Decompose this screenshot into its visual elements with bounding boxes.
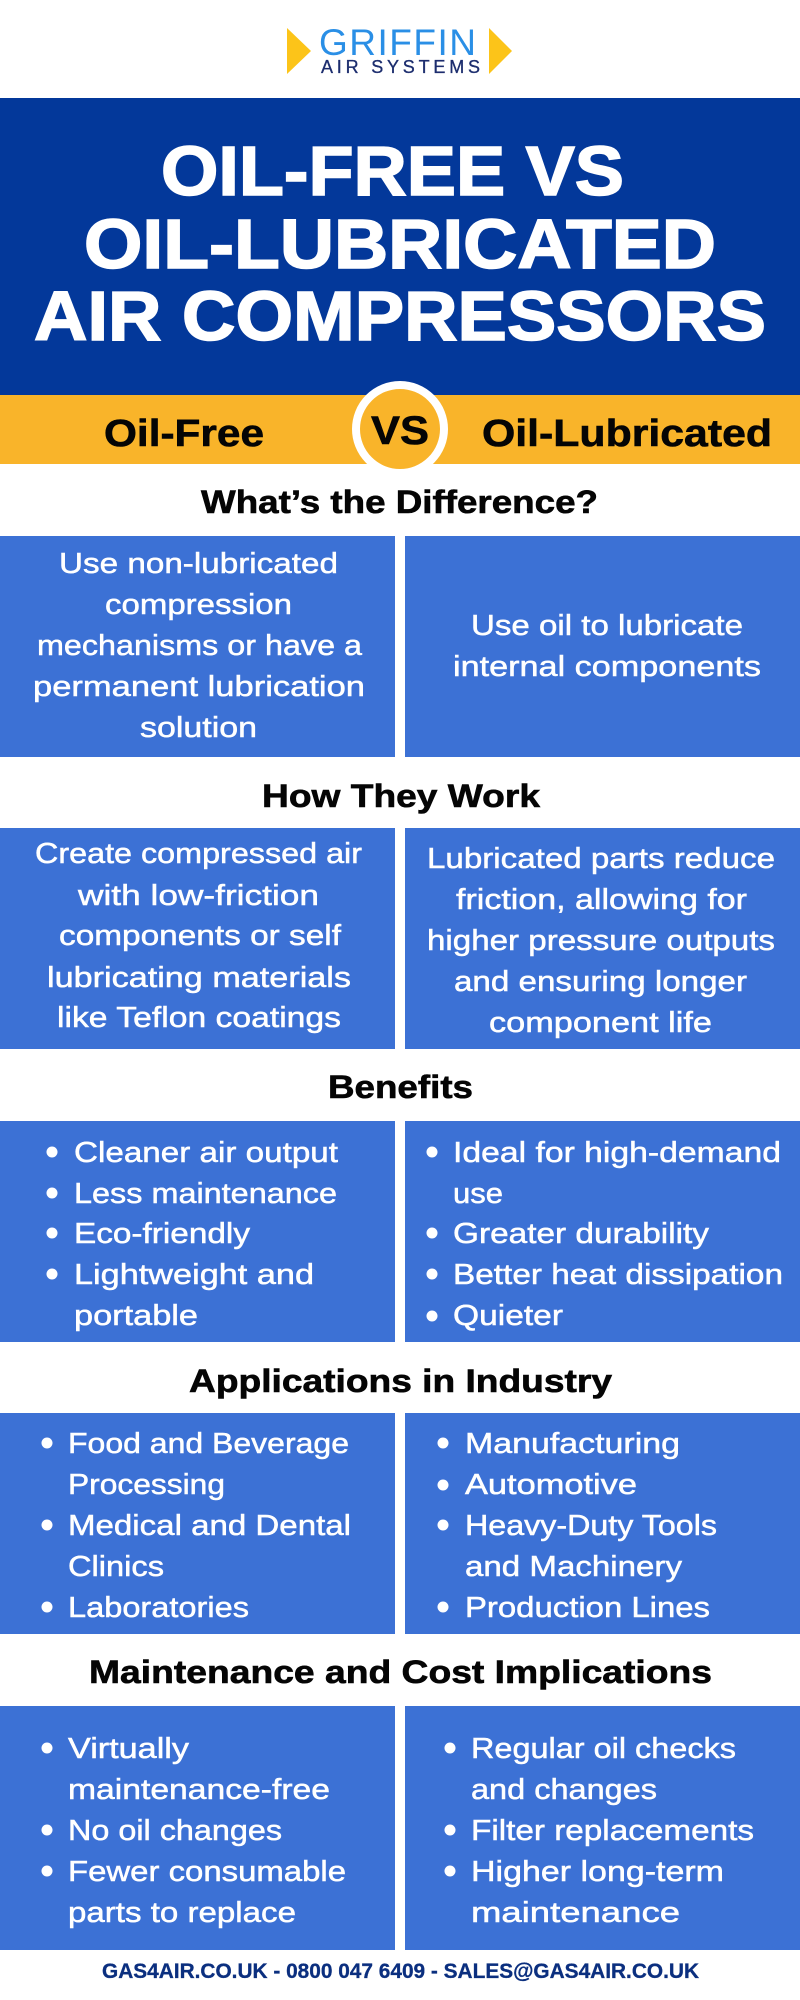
title: AIR COMPRESSORS — [34, 277, 766, 355]
panel: benefits, oil-lubricated: Better heat dissipation — [453, 1259, 783, 1291]
panel: how they work, oil-lubricated — [405, 828, 800, 1049]
panel: applications, oil-lubricated — [405, 1413, 800, 1634]
panel: applications, oil-free: Processing — [68, 1469, 225, 1501]
panel: how they work, oil-free: lubricating materials — [47, 962, 351, 994]
heading: what's the difference: What’s the Difference? — [201, 484, 598, 520]
title: OIL-FREE VS — [161, 132, 624, 210]
panel: maintenance, oil-free: maintenance-free — [68, 1774, 330, 1806]
panel: benefits, oil-lubricated — [405, 1121, 800, 1342]
panel: applications, oil-free — [0, 1413, 395, 1634]
panel: how they work, oil-lubricated: Lubricated parts reduce — [427, 843, 775, 875]
panel: applications, oil-free: Medical and Dental — [68, 1510, 351, 1542]
header banner — [0, 98, 800, 395]
panel: applications, oil-lubricated: and Machinery — [465, 1551, 683, 1583]
panel: maintenance, oil-lubricated — [405, 1706, 800, 1950]
heading: maintenance and cost implications: Maintenance and Cost Implications — [89, 1654, 712, 1690]
panel: how they work, oil-lubricated: component life — [489, 1007, 712, 1039]
panel: maintenance, oil-lubricated: and changes — [471, 1774, 657, 1806]
panel: difference, oil-free: solution — [140, 712, 257, 744]
panel: how they work, oil-lubricated: friction, allowing for — [456, 884, 747, 916]
label: oil-lubricated: Oil-Lubricated — [482, 413, 772, 455]
panel: applications, oil-lubricated: Manufacturing — [465, 1428, 680, 1460]
panel: benefits, oil-free: Eco-friendly — [74, 1218, 251, 1250]
panel: benefits, oil-lubricated: Quieter — [453, 1300, 563, 1332]
heading: how they work: How They Work — [262, 778, 540, 814]
panel: maintenance, oil-lubricated: Filter replacements — [471, 1815, 754, 1847]
label: oil-free: Oil-Free — [104, 413, 264, 455]
panel: benefits, oil-free: Less maintenance — [74, 1178, 337, 1210]
VS badge — [356, 385, 444, 473]
panel: how they work, oil-free: with low-friction — [77, 880, 319, 912]
panel: difference, oil-lubricated: internal components — [453, 651, 761, 683]
logo: Griffin Air Systems — [287, 22, 512, 77]
panel: applications, oil-lubricated: Automotive — [465, 1469, 637, 1501]
panel: maintenance, oil-free: No oil changes — [68, 1815, 282, 1847]
panel: maintenance, oil-lubricated: Higher long-term — [471, 1856, 724, 1888]
footer contact line: GAS4AIR.CO.UK - 0800 047 6409 - SALES@GAS4AIR.CO.UK — [102, 1960, 699, 1983]
panel: maintenance, oil-lubricated: maintenance — [471, 1897, 680, 1929]
panel: benefits, oil-free: Lightweight and — [74, 1259, 314, 1291]
comparison bar — [0, 385, 800, 473]
panel: how they work, oil-free: components or self — [59, 920, 342, 952]
logo: Griffin Air Systems: AIR SYSTEMS — [321, 57, 480, 77]
panel: how they work, oil-lubricated: and ensuring longer — [454, 966, 747, 998]
panel: difference, oil-free: permanent lubrication — [33, 671, 365, 703]
panel: how they work, oil-free — [0, 828, 395, 1049]
panel: benefits, oil-free: portable — [74, 1300, 198, 1332]
panel: applications, oil-free: Clinics — [68, 1551, 164, 1583]
panel: maintenance, oil-free — [0, 1706, 395, 1950]
panel: applications, oil-lubricated: Heavy-Duty Tools — [465, 1510, 717, 1542]
heading: benefits: Benefits — [328, 1069, 473, 1105]
panel: applications, oil-free: Laboratories — [68, 1592, 249, 1624]
panel: difference, oil-lubricated: Use oil to lubricate — [471, 610, 743, 642]
VS badge: VS — [371, 409, 429, 453]
panel: applications, oil-lubricated: Production Lines — [465, 1592, 710, 1624]
panel: difference, oil-free: mechanisms or have a — [37, 630, 363, 662]
panel: how they work, oil-free: like Teflon coatings — [57, 1002, 341, 1034]
panel: how they work, oil-free: Create compressed air — [35, 838, 362, 870]
panel: maintenance, oil-free: parts to replace — [68, 1897, 296, 1929]
panel: benefits, oil-free — [0, 1121, 395, 1342]
panel: difference, oil-free — [0, 536, 395, 757]
panel: benefits, oil-free: Cleaner air output — [74, 1137, 338, 1169]
panel: how they work, oil-lubricated: higher pressure outputs — [427, 925, 775, 957]
panel: maintenance, oil-lubricated: Regular oil checks — [471, 1733, 736, 1765]
panel: applications, oil-free: Food and Beverage — [68, 1428, 349, 1460]
panel: benefits, oil-lubricated: Ideal for high-demand — [453, 1137, 781, 1169]
panel: difference, oil-free: Use non-lubricated — [59, 548, 338, 580]
panel: maintenance, oil-free: Virtually — [68, 1733, 190, 1765]
logo: Griffin Air Systems: GRIFFIN — [319, 22, 476, 63]
panel: maintenance, oil-free: Fewer consumable — [68, 1856, 346, 1888]
panel: benefits, oil-lubricated: Greater durability — [453, 1218, 710, 1250]
heading: applications in industry: Applications in Industry — [189, 1363, 612, 1399]
title: OIL-LUBRICATED — [84, 205, 716, 283]
panel: benefits, oil-lubricated: use — [453, 1178, 503, 1210]
panel: difference, oil-lubricated — [405, 536, 800, 757]
panel: difference, oil-free: compression — [105, 589, 292, 621]
title — [34, 132, 766, 355]
